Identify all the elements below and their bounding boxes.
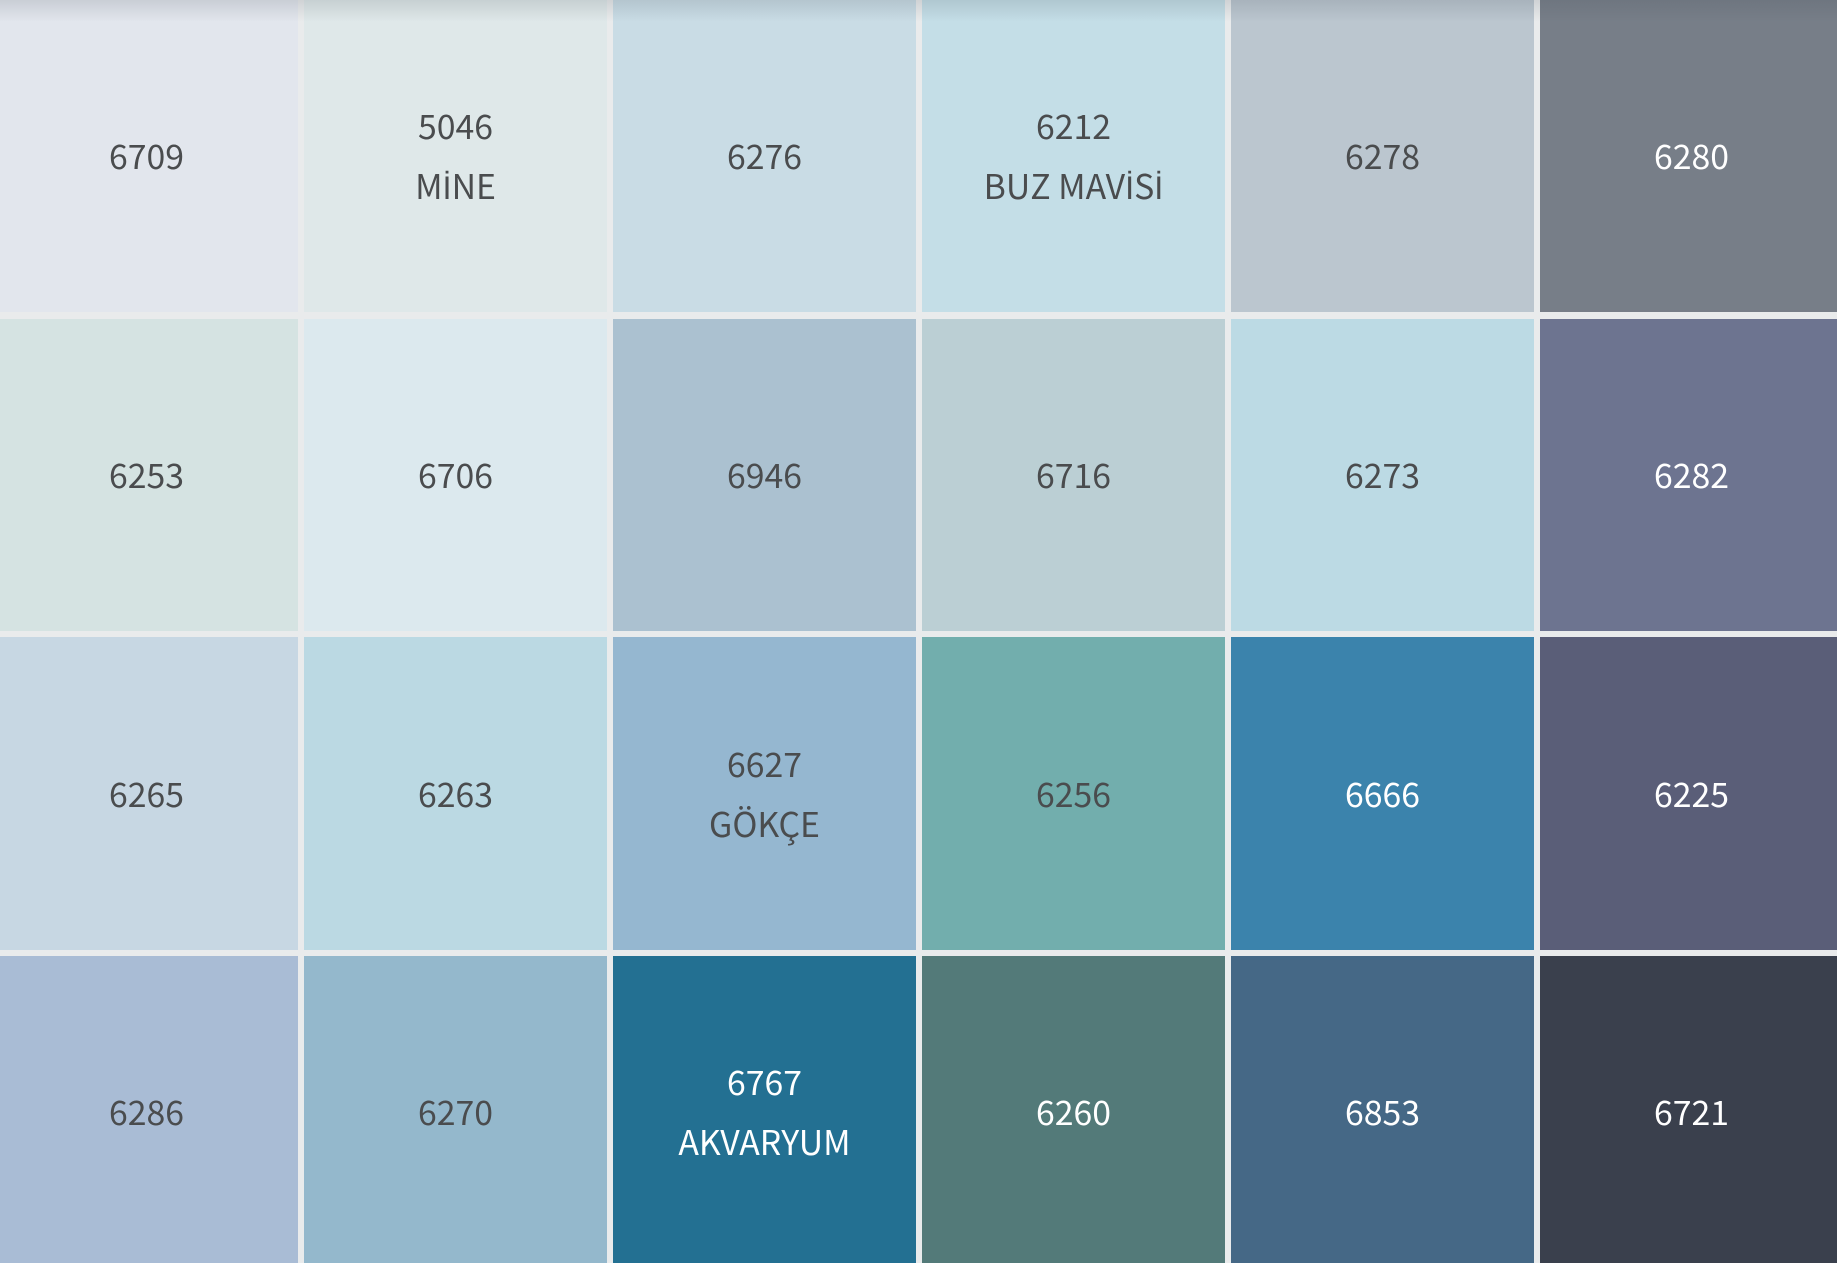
swatch 5046 Mine: 5046	[418, 100, 493, 149]
swatch 6709: 6709	[109, 130, 184, 179]
swatch 6253	[0, 319, 298, 631]
swatch 5046 Mine	[304, 0, 607, 312]
swatch 6627 Gökçe: GÖKÇE	[709, 798, 820, 847]
swatch 6666: 6666	[1345, 768, 1420, 817]
swatch 6946: 6946	[727, 449, 802, 498]
swatch 6721	[1540, 956, 1837, 1263]
swatch 6286	[0, 956, 298, 1263]
swatch 6282: 6282	[1654, 449, 1729, 498]
swatch 6946	[613, 319, 916, 631]
swatch 6253: 6253	[109, 449, 184, 498]
swatch 6260	[922, 956, 1225, 1263]
swatch 6627 Gökçe	[613, 637, 916, 950]
swatch 6270: 6270	[418, 1086, 493, 1135]
swatch 6256: 6256	[1036, 768, 1111, 817]
swatch 6278: 6278	[1345, 130, 1420, 179]
swatch 6276: 6276	[727, 130, 802, 179]
swatch 6263: 6263	[418, 768, 493, 817]
swatch 6260: 6260	[1036, 1086, 1111, 1135]
swatch 5046 Mine: MİNE	[415, 160, 496, 209]
swatch 6716	[922, 319, 1225, 631]
swatch 6212 Buz Mavisi	[922, 0, 1225, 312]
swatch 6276	[613, 0, 916, 312]
swatch 6225: 6225	[1654, 768, 1729, 817]
swatch 6263	[304, 637, 607, 950]
swatch 6265	[0, 637, 298, 950]
swatch 6212 Buz Mavisi: BUZ MAVİSİ	[984, 160, 1163, 209]
swatch 6627 Gökçe: 6627	[727, 738, 802, 787]
swatch 6721: 6721	[1654, 1086, 1729, 1135]
swatch 6212 Buz Mavisi: 6212	[1036, 100, 1111, 149]
swatch 6225	[1540, 637, 1837, 950]
swatch 6286: 6286	[109, 1086, 184, 1135]
swatch 6280	[1540, 0, 1837, 312]
swatch 6706	[304, 319, 607, 631]
swatch 6709	[0, 0, 298, 312]
swatch 6273	[1231, 319, 1534, 631]
swatch 6716: 6716	[1036, 449, 1111, 498]
swatch 6270	[304, 956, 607, 1263]
swatch 6280: 6280	[1654, 130, 1729, 179]
swatch 6278	[1231, 0, 1534, 312]
swatch 6767 Akvaryum	[613, 956, 916, 1263]
swatch 6706: 6706	[418, 449, 493, 498]
swatch 6282	[1540, 319, 1837, 631]
swatch 6853	[1231, 956, 1534, 1263]
swatch 6767 Akvaryum: 6767	[727, 1056, 802, 1105]
swatch 6767 Akvaryum: AKVARYUM	[678, 1116, 851, 1165]
swatch 6273: 6273	[1345, 449, 1420, 498]
swatch 6265: 6265	[109, 768, 184, 817]
swatch 6853: 6853	[1345, 1086, 1420, 1135]
swatch 6256	[922, 637, 1225, 950]
swatch 6666	[1231, 637, 1534, 950]
